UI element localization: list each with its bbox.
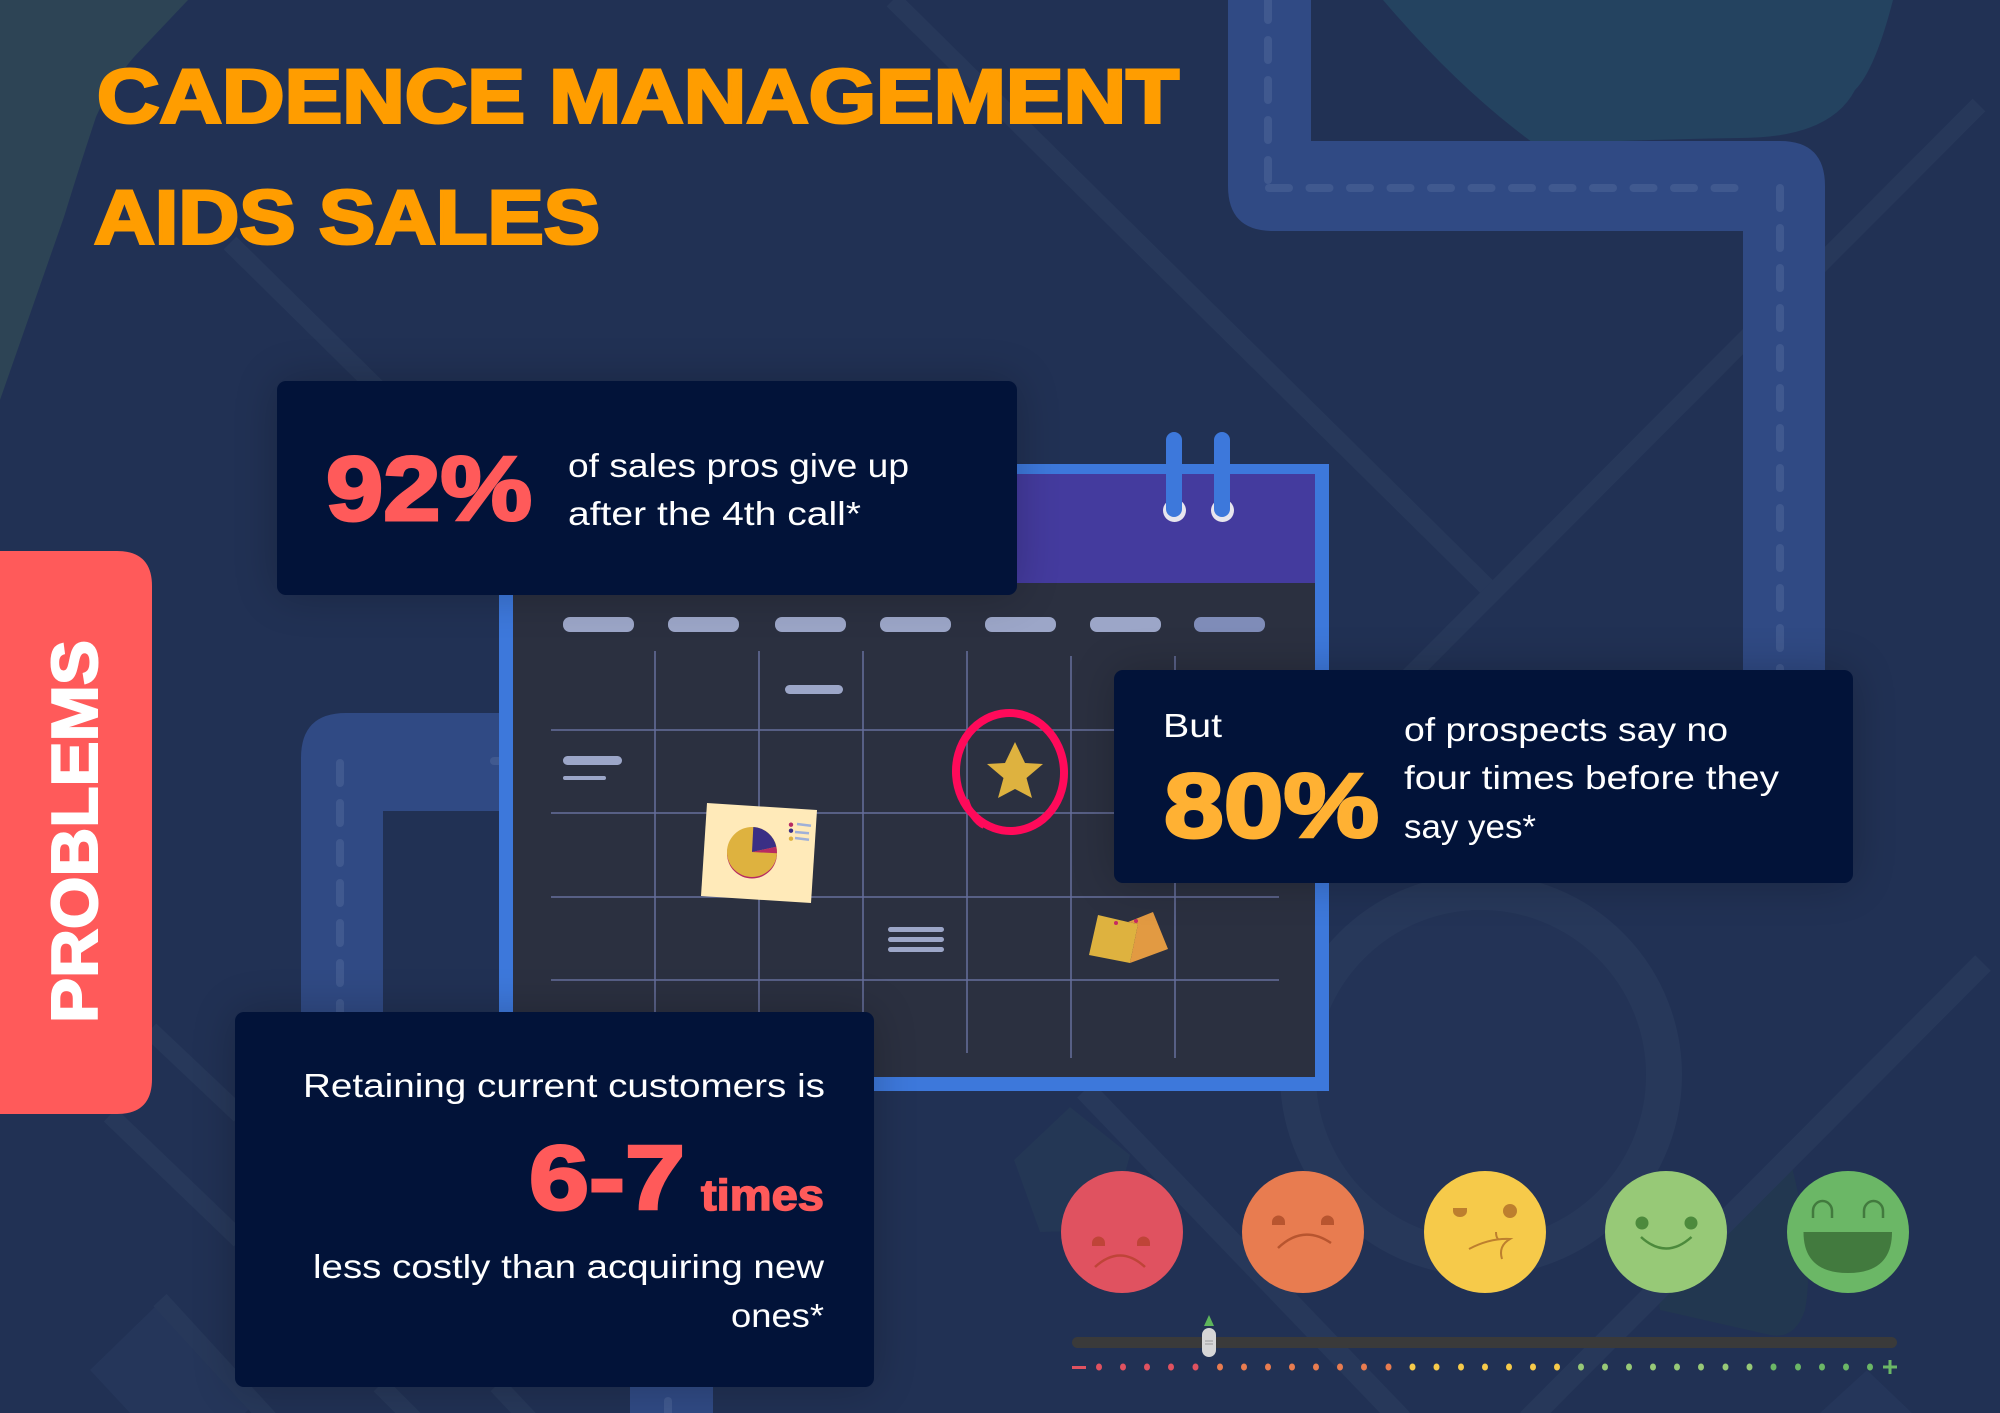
calendar body — [499, 464, 1329, 1091]
side tab: problems — [0, 551, 152, 1114]
text: retaining customers: Retaining current customers is — [303, 1067, 825, 1104]
text: prospects say no — [1404, 711, 1780, 845]
text: give up after 4th call: of sales pros give up — [568, 447, 909, 484]
calendar grid — [551, 651, 1279, 1058]
stat: 80%: 80% — [1164, 756, 1379, 857]
face: neutral — [1424, 1171, 1546, 1293]
text: prospects say no: say yes* — [1404, 808, 1536, 845]
road: top right — [1228, 0, 1825, 680]
icon: folded note — [1089, 912, 1168, 963]
face: very happy — [1787, 1171, 1909, 1293]
stat: 6-7 times: times — [701, 1171, 824, 1220]
calendar entry bars — [563, 685, 944, 952]
icon: star with red circle — [952, 709, 1068, 835]
panel: 80 percent stat — [1114, 670, 1853, 883]
icon: sticky note with pie chart — [701, 803, 817, 903]
panel: retention stat — [235, 1012, 874, 1387]
stat: 6-7 times — [529, 1128, 824, 1229]
text: give up after 4th call: after the 4th call* — [568, 495, 861, 532]
text: less costly: ones* — [731, 1297, 824, 1334]
title: CADENCE MANAGEMENT — [97, 54, 1179, 140]
slider — [1072, 1315, 1897, 1374]
title: AIDS SALES — [94, 176, 600, 260]
face: happy — [1605, 1171, 1727, 1293]
face: unhappy — [1242, 1171, 1364, 1293]
calendar rings — [1163, 432, 1234, 522]
calendar — [499, 432, 1329, 1091]
face: very unhappy — [1061, 1171, 1183, 1293]
text: less costly — [313, 1248, 824, 1334]
weekday bars — [563, 617, 1265, 632]
text: less costly: less costly than acquiring new — [313, 1248, 824, 1285]
road: bottom — [630, 1380, 713, 1413]
satisfaction faces — [1061, 1171, 1909, 1293]
scale dots — [1072, 1360, 1897, 1374]
stat: 92%: 92% — [326, 439, 532, 540]
slider thumb — [1202, 1315, 1216, 1357]
text: prospects say no: four times before they — [1404, 759, 1780, 796]
text: give up after 4th call — [568, 447, 909, 532]
text: prospects say no: of prospects say no — [1404, 711, 1728, 748]
side tab: problems: PROBLEMS — [38, 640, 111, 1023]
text: but: But — [1163, 707, 1222, 744]
panel: 92 percent stat — [277, 381, 1017, 595]
stat: 6-7 times: 6-7 — [529, 1128, 685, 1229]
title — [94, 54, 1179, 260]
road: left — [301, 713, 510, 1020]
